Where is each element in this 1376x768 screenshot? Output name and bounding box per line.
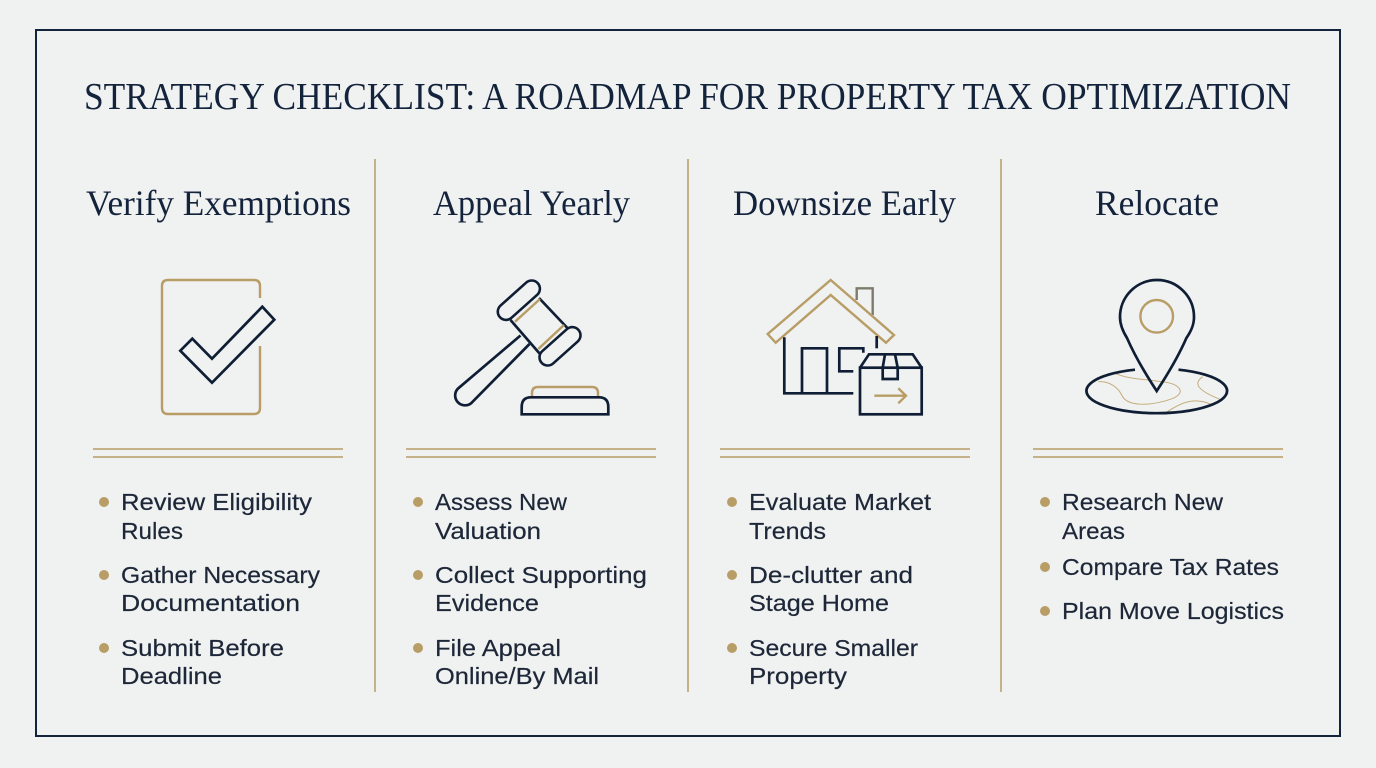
list: downsize early steps: Secure Smaller xyxy=(749,635,918,661)
list: verify exemptions steps: Submit Before xyxy=(121,635,284,661)
list: appeal yearly steps: Collect Supporting xyxy=(435,562,647,588)
list: verify exemptions steps: Documentation xyxy=(121,590,300,616)
list: downsize early steps: Evaluate Market xyxy=(749,489,932,515)
list: relocate steps: Research New xyxy=(1062,489,1223,515)
list: downsize early steps: De-clutter and xyxy=(749,562,913,588)
list: verify exemptions steps: Gather Necessary xyxy=(121,562,321,588)
title: STRATEGY CHECKLIST: A ROADMAP FOR PROPERTY TAX OPTIMIZATION xyxy=(84,76,1291,118)
panel: downsize early xyxy=(720,183,970,689)
list: verify exemptions steps: Rules xyxy=(121,518,183,544)
list: relocate steps: Areas xyxy=(1062,518,1125,544)
heading: downsize early: Downsize Early xyxy=(733,183,956,223)
list: appeal yearly steps: File Appeal xyxy=(435,635,561,661)
list: downsize early steps: Trends xyxy=(749,518,826,544)
heading: relocate: Relocate xyxy=(1095,183,1219,223)
list: appeal yearly steps: Valuation xyxy=(435,518,541,544)
list: appeal yearly steps: Assess New xyxy=(435,489,567,515)
icon: checkbox with check mark xyxy=(162,280,274,414)
icon: house with moving box xyxy=(768,280,922,414)
list: appeal yearly steps xyxy=(413,489,647,689)
list: downsize early steps: Property xyxy=(749,663,848,689)
icon: map pin on map xyxy=(1086,280,1227,413)
list: downsize early steps: Stage Home xyxy=(749,590,889,616)
list: appeal yearly steps: Online/By Mail xyxy=(435,663,599,689)
list: downsize early steps xyxy=(727,489,932,689)
list: appeal yearly steps: Evidence xyxy=(435,590,539,616)
list: relocate steps: Plan Move Logistics xyxy=(1062,598,1284,624)
panel: relocate xyxy=(1033,183,1284,624)
icon: gavel xyxy=(455,289,608,414)
list: verify exemptions steps: Review Eligibility xyxy=(121,489,313,515)
list: verify exemptions steps xyxy=(99,489,321,689)
list: verify exemptions steps: Deadline xyxy=(121,663,222,689)
panel: appeal yearly xyxy=(406,183,656,689)
panel: verify exemptions xyxy=(86,183,351,689)
heading: appeal yearly: Appeal Yearly xyxy=(433,183,630,223)
heading: verify exemptions: Verify Exemptions xyxy=(86,183,351,223)
list: relocate steps xyxy=(1040,489,1284,624)
list: relocate steps: Compare Tax Rates xyxy=(1062,554,1279,580)
